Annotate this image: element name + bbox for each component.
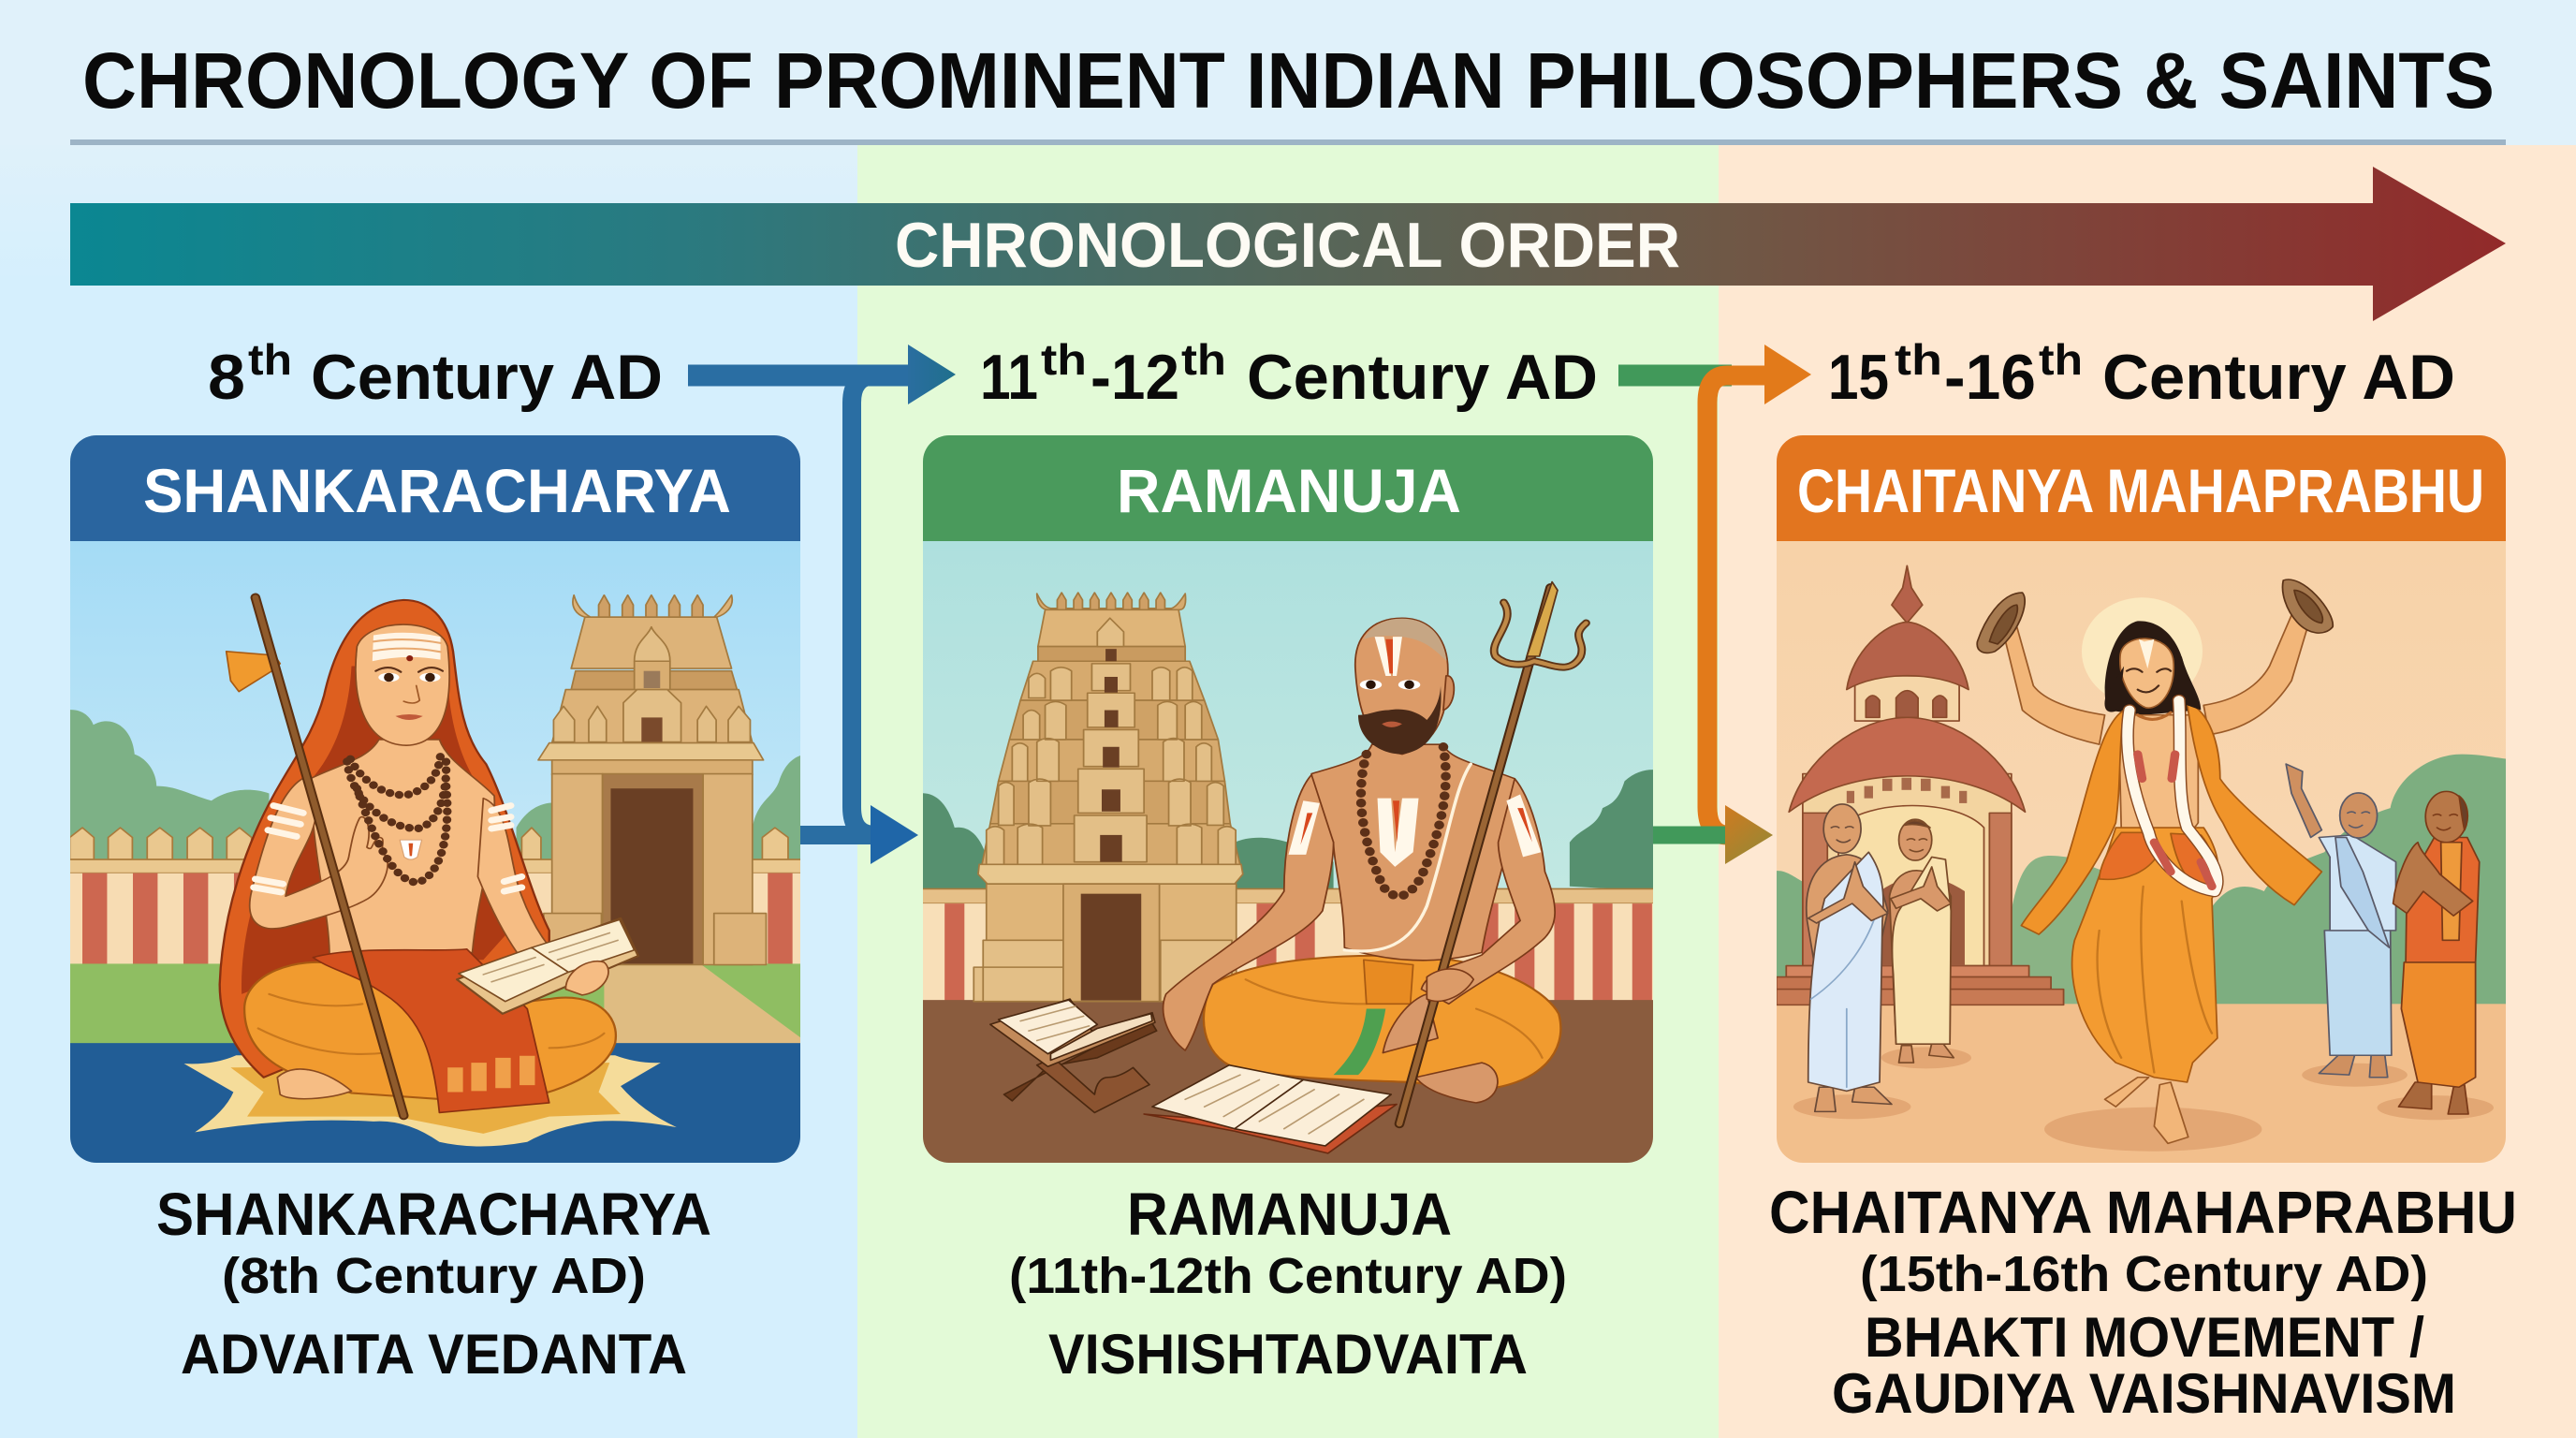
- date label: 15th-16th century: th: [2039, 335, 2083, 384]
- shadows: [1793, 1047, 2494, 1152]
- garland: [2128, 700, 2217, 891]
- title: CHRONOLOGY OF PROMINENT INDIAN PHILOSOPHERS & SAINTS: [82, 37, 2495, 125]
- scene: Ramanuja with gopuram: [919, 539, 1658, 1167]
- dhoti: [2072, 828, 2218, 1082]
- deerskin mat: [184, 1055, 677, 1147]
- scene: Shankaracharya with temple: [66, 539, 805, 1166]
- sacred marks: [1378, 799, 1419, 867]
- right devotee blue: [2286, 764, 2396, 1078]
- connector arrow: orange and green: [1618, 345, 1811, 864]
- cymbals: [1977, 580, 2333, 653]
- devotee cream: [1890, 819, 1954, 1063]
- caption: Shankaracharya: [156, 1181, 711, 1386]
- caption: Shankaracharya: SHANKARACHARYA: [156, 1181, 711, 1248]
- date label: 11th-12th century: Century AD: [1247, 342, 1598, 413]
- stripes on arms: [254, 806, 521, 892]
- caption: Chaitanya Mahaprabhu: CHAITANYA MAHAPRABHU: [1769, 1179, 2517, 1246]
- trident: [1399, 588, 1550, 1123]
- card: Chaitanya Mahaprabhu: [1773, 435, 2511, 1166]
- date label: 8th century: [208, 335, 663, 413]
- caption: Ramanuja: (11th-12th Century AD): [1009, 1248, 1567, 1304]
- necklaces: [347, 755, 447, 883]
- torso: [1311, 744, 1515, 961]
- shawl and torso: [2118, 715, 2198, 838]
- sash: [313, 949, 549, 1112]
- caption: Ramanuja: VISHISHTADVAITA: [1048, 1323, 1528, 1386]
- card: Shankaracharya: [66, 435, 805, 1166]
- gopuram: [973, 593, 1243, 1002]
- torso and arms: [311, 740, 494, 958]
- chronological order arrow: [70, 167, 2506, 321]
- scene: Chaitanya dancing with devotees: [1773, 539, 2511, 1166]
- chronological order arrow: CHRONOLOGICAL ORDER: [895, 210, 1680, 281]
- card: Ramanuja: RAMANUJA: [1117, 456, 1461, 525]
- date label: 11th-12th century: -12: [1090, 342, 1179, 413]
- card: Ramanuja: [919, 435, 1658, 1167]
- date label: 15th-16th century: -16: [1944, 342, 2036, 413]
- date label: 15th-16th century: 15: [1828, 342, 1889, 413]
- date label: 8th century: th: [248, 335, 292, 384]
- head: [356, 624, 449, 745]
- cloak: [220, 600, 549, 1078]
- date label: 11th-12th century: 11: [980, 342, 1038, 413]
- hair: [2104, 621, 2188, 714]
- fence: [66, 828, 805, 873]
- temple: [1777, 565, 2064, 1005]
- halo: [2082, 597, 2203, 694]
- caption: Ramanuja: RAMANUJA: [1127, 1181, 1452, 1248]
- legs: [1204, 956, 1560, 1090]
- right devotee orange: [2393, 791, 2480, 1114]
- dhoti: [244, 962, 616, 1103]
- date label: 11th-12th century: th: [1041, 335, 1087, 384]
- date label: 11th-12th century: th: [1181, 335, 1226, 384]
- date label: 11th-12th century: [980, 335, 1598, 413]
- date label: 15th-16th century: [1828, 335, 2455, 413]
- date label: 15th-16th century: Century AD: [2102, 342, 2455, 413]
- devotee blue left: [1807, 804, 1892, 1111]
- date label: 8th century: Century AD: [311, 342, 663, 413]
- caption: Chaitanya Mahaprabhu: GAUDIYA VAISHNAVISM: [1832, 1362, 2456, 1425]
- caption: Chaitanya Mahaprabhu: BHAKTI MOVEMENT /: [1865, 1306, 2424, 1369]
- lectern and book: [1004, 1023, 1157, 1101]
- caption: Shankaracharya: ADVAITA VEDANTA: [181, 1323, 687, 1386]
- caption: Chaitanya Mahaprabhu: [1769, 1179, 2517, 1425]
- face: [2120, 638, 2174, 708]
- open book: [1144, 1105, 1397, 1153]
- staff and flag: [227, 652, 280, 692]
- connector arrow: blue: [688, 345, 956, 864]
- caption: Ramanuja: [1009, 1181, 1567, 1386]
- book: [457, 918, 638, 1014]
- arms: [2005, 614, 2307, 745]
- temple: [538, 595, 766, 964]
- date label: 8th century: 8: [208, 342, 245, 413]
- caption: Shankaracharya: (8th Century AD): [222, 1248, 646, 1304]
- date label: 15th-16th century: th: [1895, 335, 1942, 384]
- caption: Chaitanya Mahaprabhu: (15th-16th Century AD): [1860, 1246, 2428, 1302]
- head: [1355, 618, 1448, 755]
- card: Shankaracharya: SHANKARACHARYA: [143, 456, 731, 525]
